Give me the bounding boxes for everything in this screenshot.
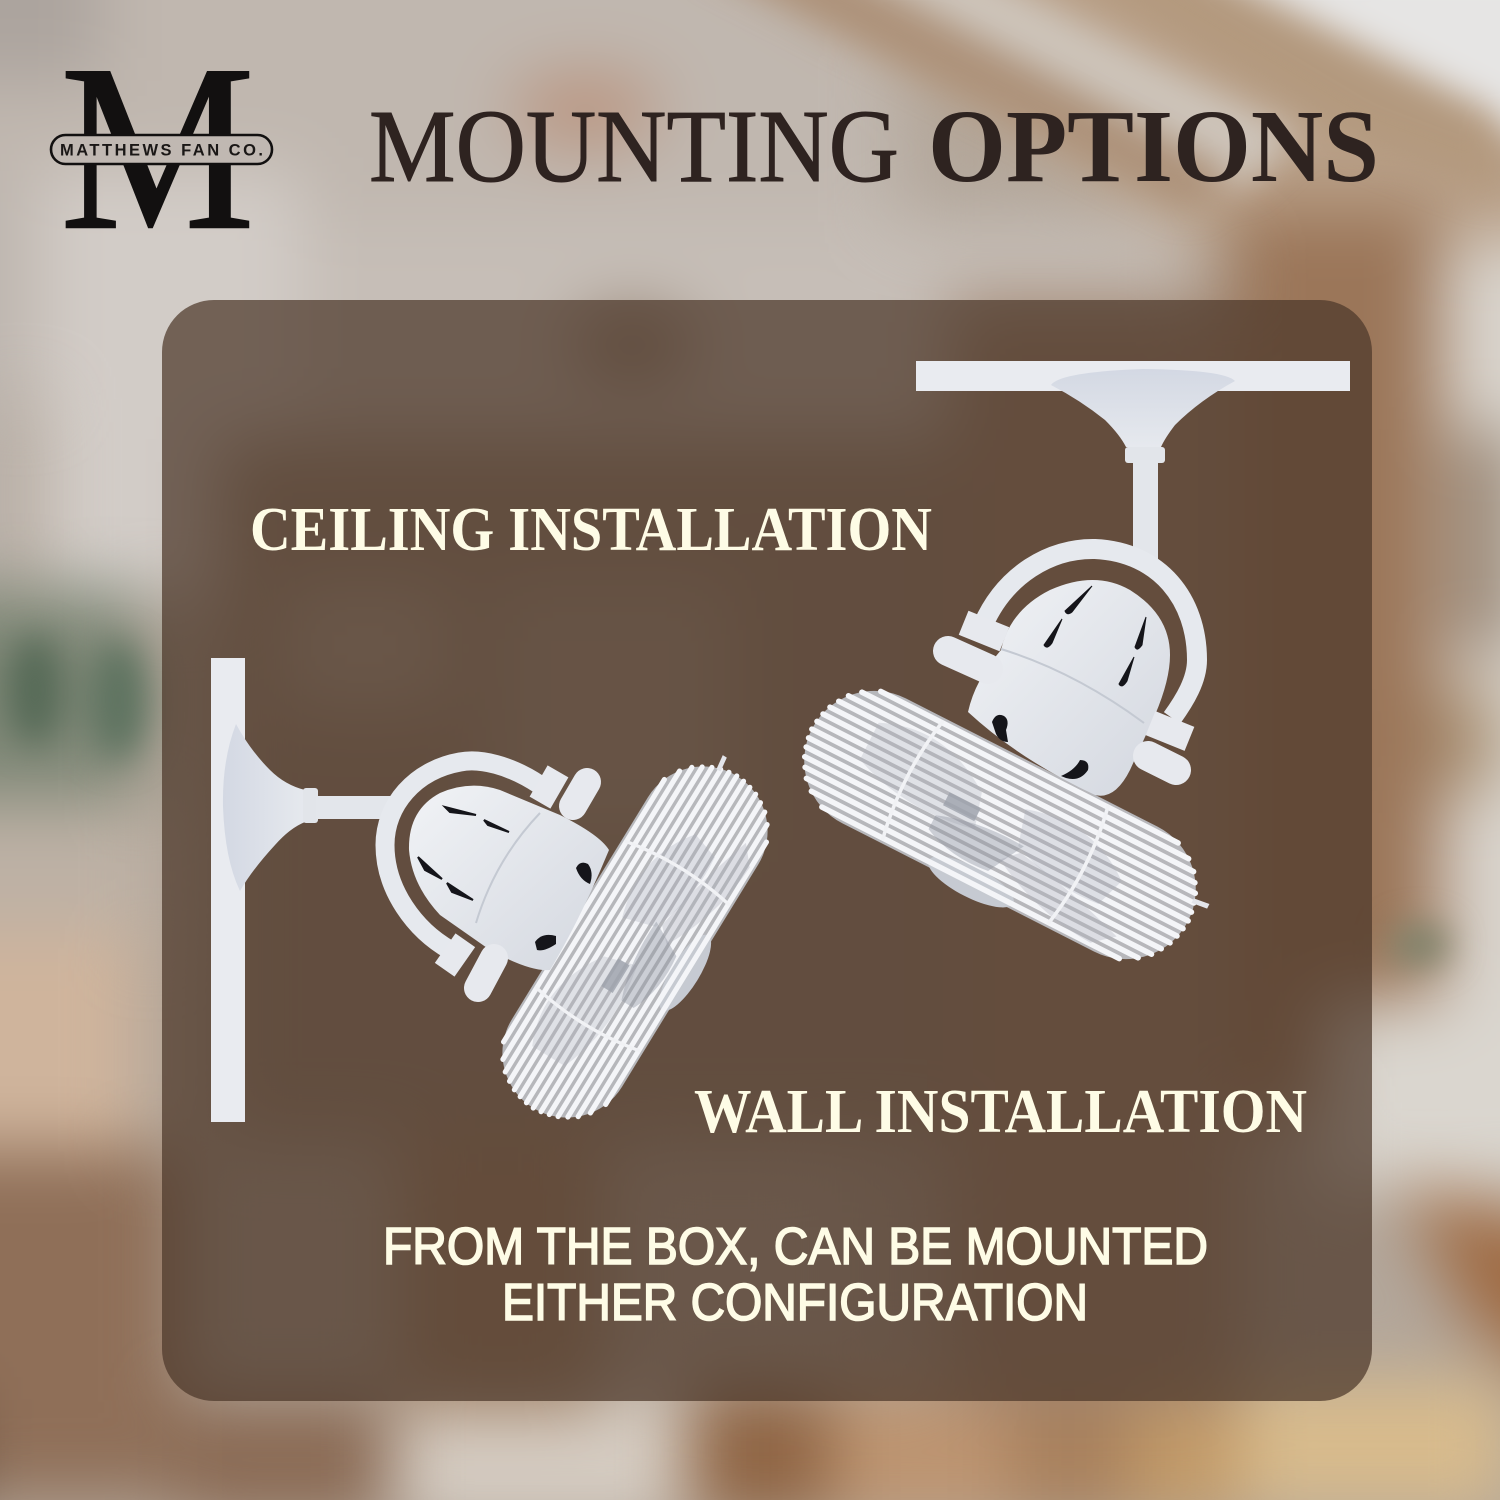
panel: translucent brown rounded card (162, 300, 1372, 1401)
wall canopy (223, 724, 305, 891)
logo: Matthews Fan Co. monogram: M (60, 16, 255, 280)
title: Mounting Options: OPTIONS (928, 89, 1379, 204)
fan cage (478, 733, 805, 1146)
pivot knobs (948, 611, 1194, 770)
motor housing (968, 580, 1170, 796)
heading: wall installation: WALL INSTALLATION (694, 1078, 1307, 1146)
ceiling bar (916, 361, 1350, 391)
pivot knobs (435, 765, 587, 988)
text block: mounting note: EITHER CONFIGURATION (502, 1274, 1088, 1332)
ceiling canopy (1051, 369, 1235, 447)
heading: ceiling installation: CEILING INSTALLATION (250, 496, 932, 564)
motor housing (409, 786, 609, 970)
logo: Matthews Fan Co. monogram: MATTHEWS FAN CO. (60, 142, 263, 160)
downrod and yoke (983, 447, 1197, 718)
text block: mounting note (383, 1218, 1208, 1332)
text block: mounting note: FROM THE BOX, CAN BE MOUNTED (383, 1218, 1208, 1276)
wall bar (211, 658, 245, 1122)
title: Mounting Options: MOUNTING (369, 89, 899, 204)
illustration: wall-mounted fan (211, 658, 805, 1146)
fan cage (776, 667, 1230, 997)
illustration: ceiling-mounted fan (776, 361, 1350, 997)
arm and yoke (303, 761, 540, 950)
